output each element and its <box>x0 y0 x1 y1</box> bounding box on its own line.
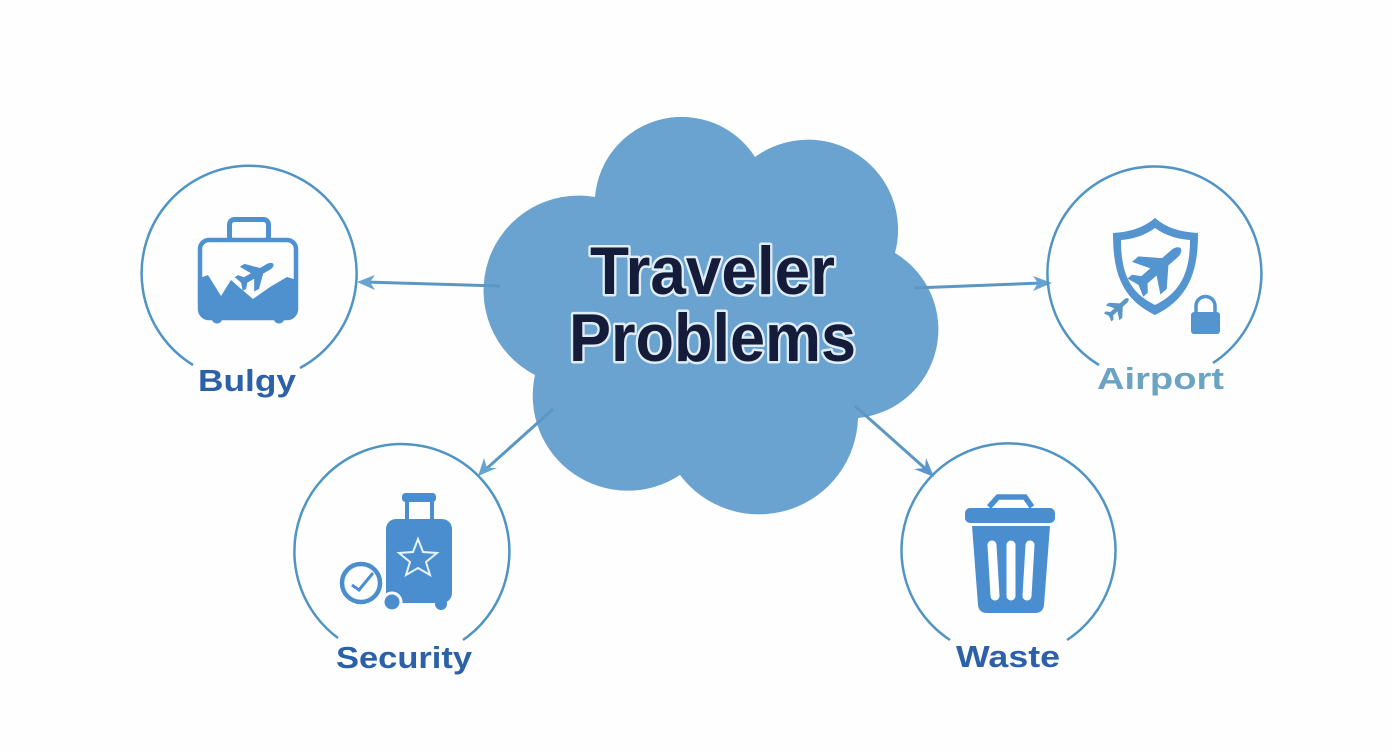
label: Security: Security <box>336 640 473 675</box>
arrow: to Airport <box>914 276 1052 291</box>
arrow: to Bulgy <box>357 275 500 290</box>
icon: trash can <box>965 497 1055 613</box>
ring: Bulgy <box>142 166 357 368</box>
ring: Security <box>294 444 509 640</box>
arrow: to Waste <box>855 406 934 477</box>
icon: suitcase with plane <box>199 220 297 324</box>
title: Traveler Problems: Traveler <box>590 233 835 309</box>
cloud: central shape <box>484 117 938 514</box>
node: Airport <box>1047 166 1261 396</box>
node: Waste <box>902 443 1116 674</box>
label: Waste: Waste <box>956 639 1060 674</box>
label: Airport: Airport <box>1097 361 1224 396</box>
title: Traveler Problems <box>569 233 856 376</box>
ring: Airport <box>1047 166 1261 365</box>
title: Traveler Problems: Problems <box>569 300 856 376</box>
label: Bulgy: Bulgy <box>198 363 297 398</box>
node: Bulgy <box>142 166 357 398</box>
arrow: to Security <box>478 409 553 476</box>
ring: Waste <box>902 443 1116 640</box>
icon: rolling suitcase with star and check <box>342 493 452 612</box>
icon: shield, planes and lock <box>1101 218 1220 334</box>
node: Security <box>294 444 509 675</box>
